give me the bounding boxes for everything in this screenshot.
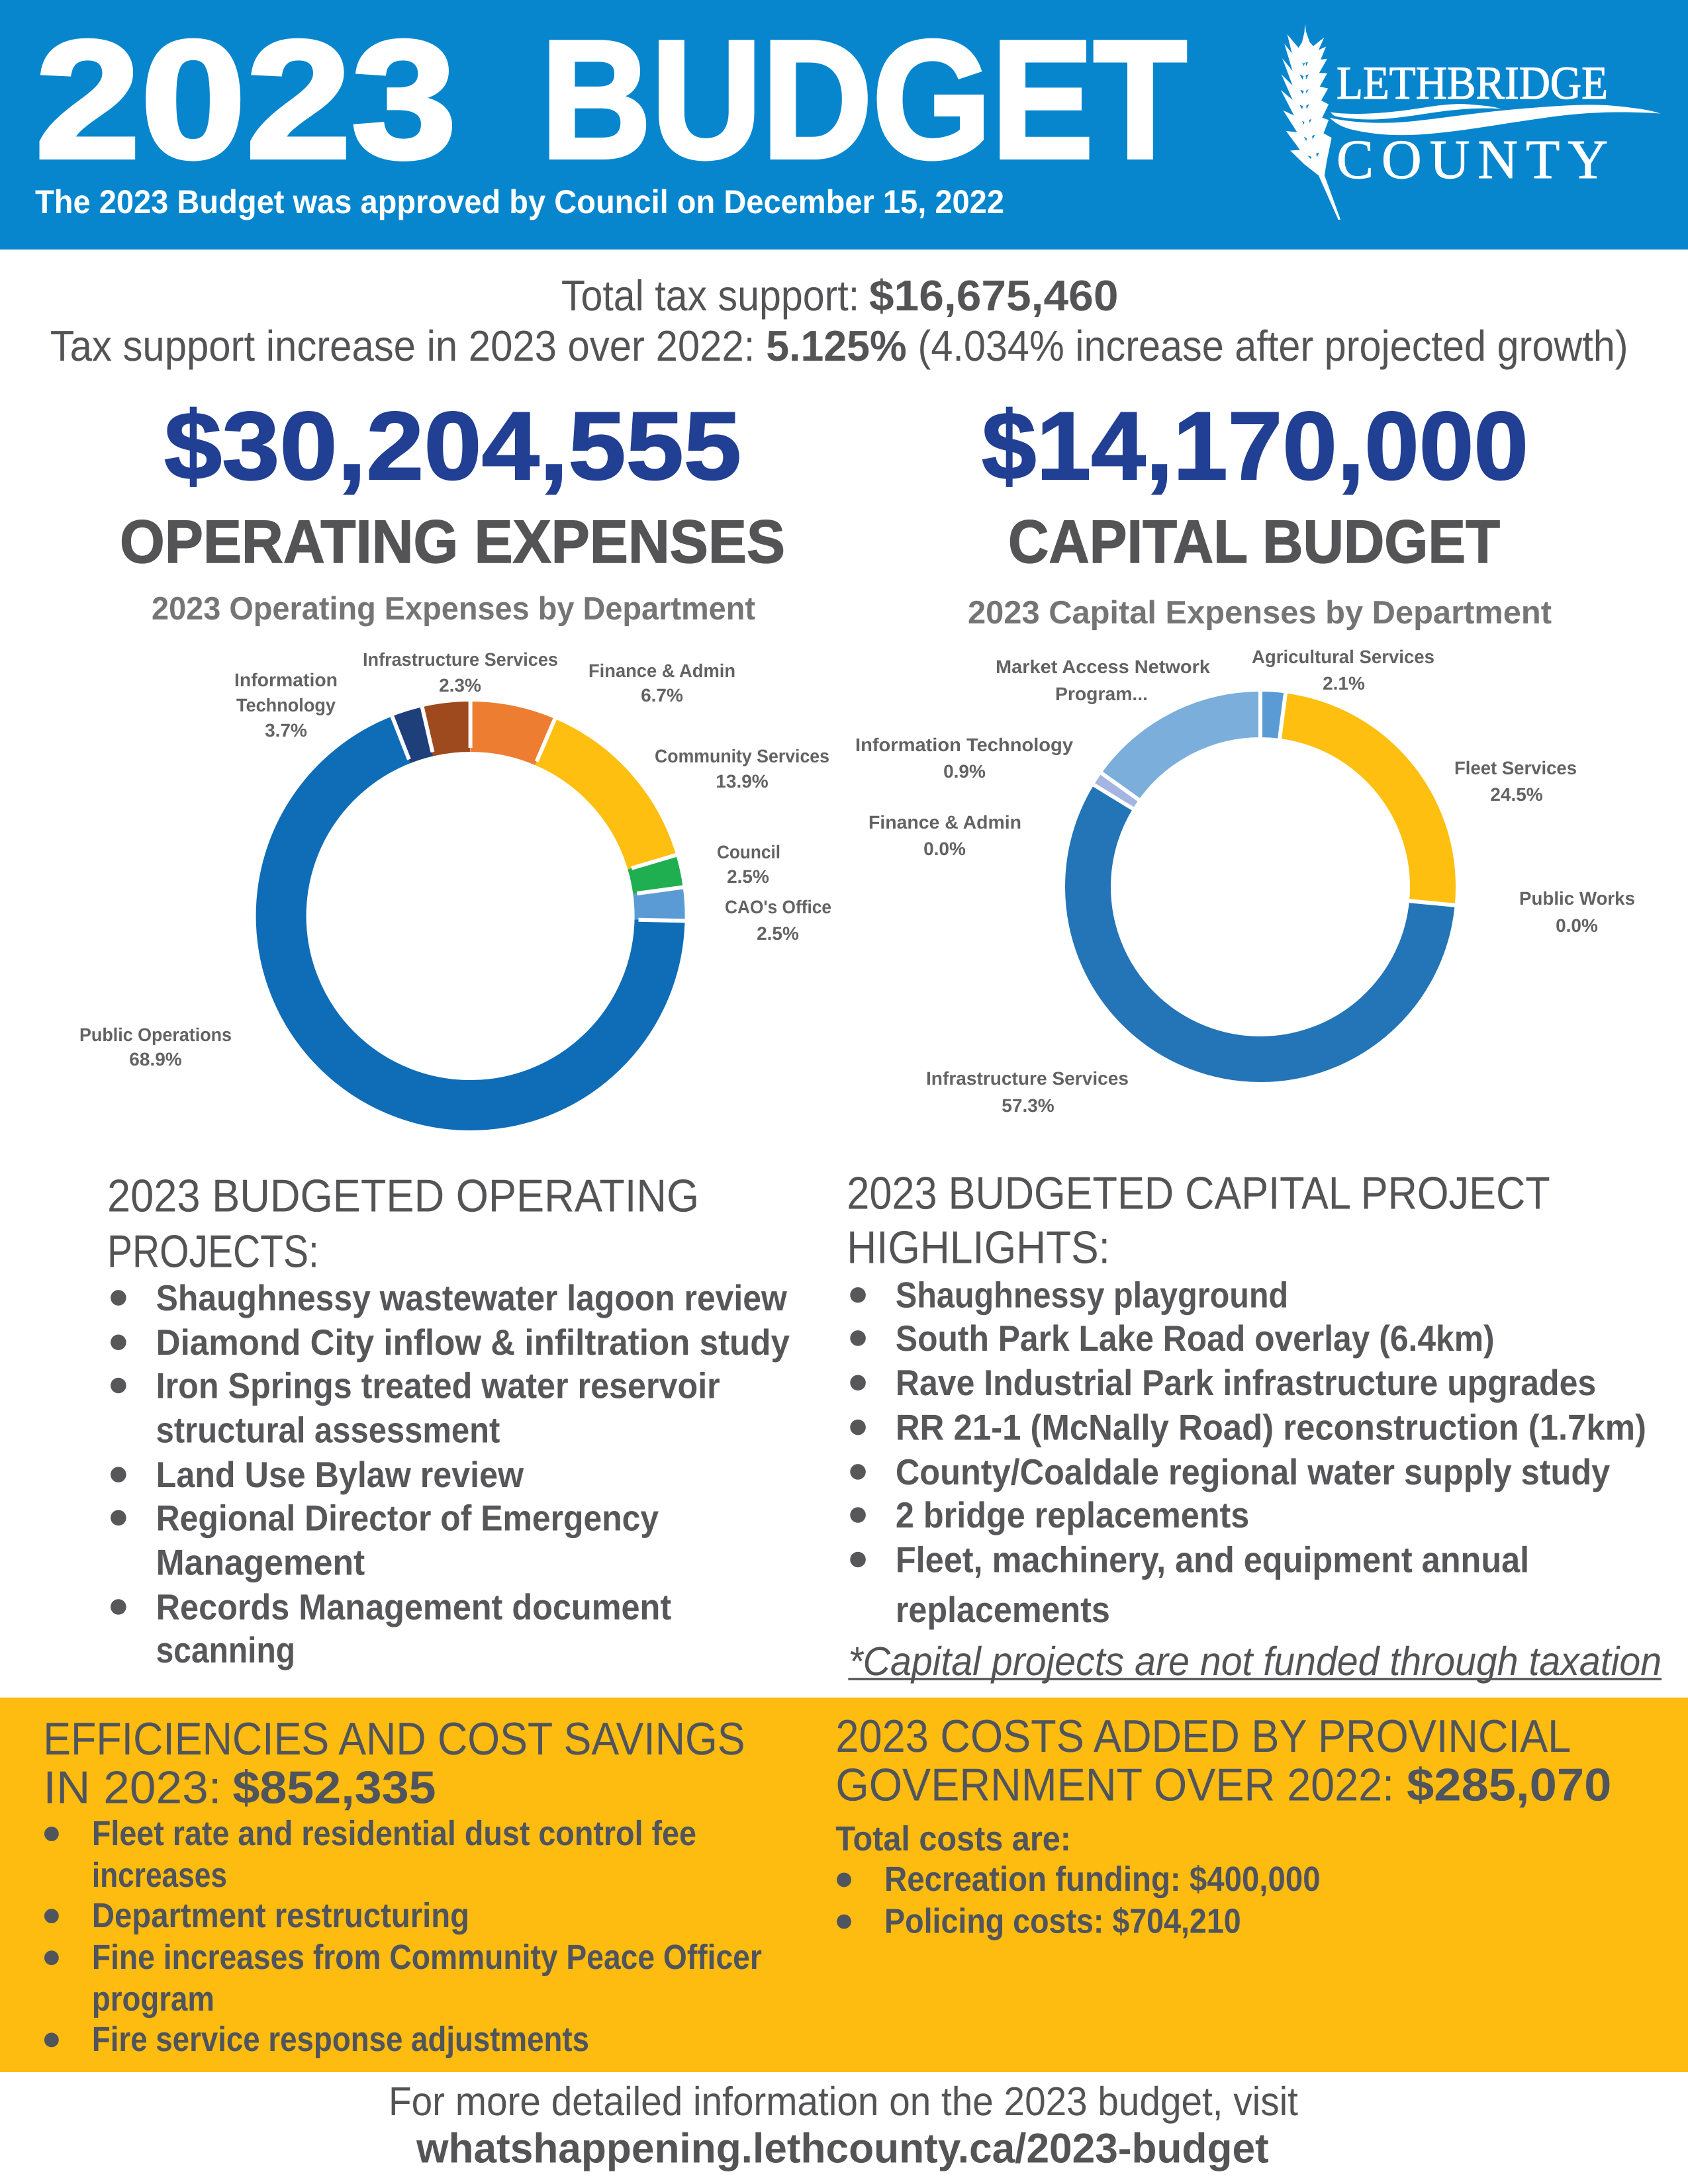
donut labels: operating: 2.5% xyxy=(757,923,799,944)
donut labels: capital: 0.0% xyxy=(923,839,966,859)
total tax support: $16,675,460 xyxy=(869,271,1119,320)
capital total: $14,170,000 xyxy=(982,392,1528,500)
icon: logo swoosh xyxy=(1329,104,1660,135)
text block: capital projects list xyxy=(847,1167,1662,1685)
operating bullets: Records Management document xyxy=(156,1586,672,1628)
provincial costs heading: 2023 COSTS ADDED BY PROVINCIAL xyxy=(835,1710,1571,1762)
donut labels: operating: Public Operations xyxy=(79,1024,232,1045)
capital bullets: replacements xyxy=(896,1589,1110,1631)
panel: provincial costs xyxy=(835,1710,1611,1941)
panel: capital budget xyxy=(855,392,1635,1116)
icon: wheat stalk xyxy=(1281,24,1340,220)
capital bullets: County/Coaldale regional water supply study xyxy=(896,1451,1611,1492)
operating bullets: structural assessment xyxy=(156,1409,500,1451)
text block: operating projects list xyxy=(107,1169,790,1671)
title: 2023 xyxy=(35,5,457,193)
donut labels: capital: Fleet Services xyxy=(1454,758,1577,778)
panel: yellow savings and costs band xyxy=(0,1698,1688,2072)
donut labels: operating: Council xyxy=(717,842,780,862)
operating bullets: Land Use Bylaw review xyxy=(156,1454,525,1496)
subtitle: approval date: The 2023 Budget was approved by Council on December 15, 2022 xyxy=(35,183,1004,220)
total tax support: Total tax support: xyxy=(561,271,859,320)
text block: tax support summary xyxy=(50,271,1628,371)
efficiencies bullets: Department restructuring xyxy=(92,1897,469,1936)
donut labels: capital: Program... xyxy=(1055,684,1148,704)
capital projects heading xyxy=(847,1167,1550,1273)
operating bullets: Iron Springs treated water reservoir xyxy=(156,1365,720,1406)
capital projects heading: HIGHLIGHTS: xyxy=(847,1221,1110,1273)
provincial costs bullets xyxy=(837,1860,1321,1941)
tax support increase: (4.034% increase after projected growth) xyxy=(918,322,1628,371)
efficiencies bullets: program xyxy=(92,1980,214,2019)
capital bullets: RR 21-1 (McNally Road) reconstruction (1.7km) xyxy=(896,1406,1646,1448)
capital heading: CAPITAL BUDGET xyxy=(1008,508,1500,576)
efficiencies bullets: Fleet rate and residential dust control fee xyxy=(92,1815,696,1853)
donut labels: capital: Infrastructure Services xyxy=(926,1068,1129,1089)
tax support increase: 5.125% xyxy=(766,322,907,371)
operating chart title: 2023 Operating Expenses by Department xyxy=(152,591,755,627)
donut chart: operating expenses by department xyxy=(281,695,692,1105)
donut labels: capital: 57.3% xyxy=(1002,1095,1055,1116)
donut labels: capital: 2.1% xyxy=(1323,673,1365,694)
donut labels: operating: 3.7% xyxy=(265,720,307,741)
footer link: whatshappening.lethcounty.ca/2023-budget xyxy=(415,2126,1269,2172)
donut labels: operating: 6.7% xyxy=(641,685,683,705)
donut labels: operating: Finance & Admin xyxy=(588,660,735,681)
provincial costs bullets: Policing costs: $704,210 xyxy=(884,1902,1241,1941)
donut labels: capital: Agricultural Services xyxy=(1252,647,1434,667)
donut labels: operating: Community Services xyxy=(655,746,829,766)
title xyxy=(35,5,1187,193)
donut labels: operating: Infrastructure Services xyxy=(363,649,558,670)
provincial costs heading xyxy=(835,1710,1611,1810)
footer line: For more detailed information on the 2023 budget, visit xyxy=(389,2080,1298,2125)
donut labels: capital xyxy=(855,647,1635,1116)
donut labels: operating xyxy=(79,649,831,1069)
operating bullets: Diamond City inflow & infiltration study xyxy=(156,1322,790,1363)
operating heading: OPERATING EXPENSES xyxy=(120,508,785,576)
donut labels: operating: 68.9% xyxy=(129,1049,182,1069)
provincial costs heading: GOVERNMENT OVER 2022: xyxy=(835,1758,1394,1810)
donut chart: capital expenses by department xyxy=(1088,686,1461,1059)
efficiencies heading xyxy=(43,1713,745,1813)
efficiencies heading: IN 2023: xyxy=(43,1762,222,1813)
operating bullets: Regional Director of Emergency xyxy=(156,1497,659,1539)
donut labels: operating: 2.5% xyxy=(727,866,769,887)
total costs label: Total costs are: xyxy=(835,1820,1071,1859)
logo: Lethbridge County xyxy=(1281,24,1660,220)
tax support increase xyxy=(50,322,1628,371)
operating bullets xyxy=(111,1277,790,1671)
panel: header banner xyxy=(0,0,1688,250)
donut labels: capital: 0.0% xyxy=(1556,915,1598,936)
logo wordmark: Lethbridge: LETHBRIDGE xyxy=(1336,58,1608,109)
capital bullets xyxy=(850,1274,1646,1631)
total tax support xyxy=(561,271,1119,320)
provincial costs bullets: Recreation funding: $400,000 xyxy=(884,1860,1321,1899)
efficiencies heading: $852,335 xyxy=(232,1762,436,1813)
panel: efficiencies and cost savings xyxy=(43,1713,762,2060)
efficiencies bullets xyxy=(44,1815,762,2060)
capital bullets: 2 bridge replacements xyxy=(896,1494,1249,1536)
efficiencies heading: EFFICIENCIES AND COST SAVINGS xyxy=(43,1713,745,1764)
donut labels: capital: Public Works xyxy=(1519,888,1635,909)
operating bullets: scanning xyxy=(156,1629,295,1671)
capital bullets: South Park Lake Road overlay (6.4km) xyxy=(896,1317,1495,1359)
donut labels: capital: Market Access Network xyxy=(996,657,1210,677)
efficiencies bullets: Fine increases from Community Peace Officer xyxy=(92,1938,762,1978)
donut labels: capital: Information Technology xyxy=(855,735,1073,755)
donut labels: capital: Finance & Admin xyxy=(868,812,1021,833)
provincial costs heading: $285,070 xyxy=(1407,1758,1611,1810)
operating projects heading: 2023 BUDGETED OPERATING xyxy=(107,1169,699,1221)
donut labels: operating: 13.9% xyxy=(716,771,769,792)
donut labels: operating: CAO's Office xyxy=(725,897,831,917)
tax support increase: Tax support increase in 2023 over 2022: xyxy=(50,322,755,371)
capital bullets: Rave Industrial Park infrastructure upgrades xyxy=(896,1362,1596,1404)
panel: operating expenses xyxy=(79,392,831,1105)
capital projects heading: 2023 BUDGETED CAPITAL PROJECT xyxy=(847,1167,1550,1218)
operating bullets: Management xyxy=(156,1541,365,1583)
title: BUDGET xyxy=(541,5,1187,193)
donut labels: operating: Information xyxy=(234,670,338,690)
footer: more information xyxy=(389,2080,1298,2172)
capital bullets: Fleet, machinery, and equipment annual xyxy=(896,1539,1529,1580)
donut labels: capital: 0.9% xyxy=(943,761,986,782)
operating projects heading xyxy=(107,1169,699,1277)
operating total: $30,204,555 xyxy=(164,392,741,500)
logo wordmark: County: COUNTY xyxy=(1336,129,1608,191)
efficiencies bullets: increases xyxy=(92,1856,227,1895)
capital bullets: Shaughnessy playground xyxy=(896,1274,1288,1316)
donut labels: capital: 24.5% xyxy=(1490,784,1543,805)
efficiencies bullets: Fire service response adjustments xyxy=(92,2021,589,2060)
capital chart title: 2023 Capital Expenses by Department xyxy=(968,595,1552,631)
operating bullets: Shaughnessy wastewater lagoon review xyxy=(156,1277,788,1318)
operating projects heading: PROJECTS: xyxy=(107,1226,319,1277)
donut labels: operating: Technology xyxy=(236,695,336,715)
donut labels: operating: 2.3% xyxy=(439,675,481,696)
